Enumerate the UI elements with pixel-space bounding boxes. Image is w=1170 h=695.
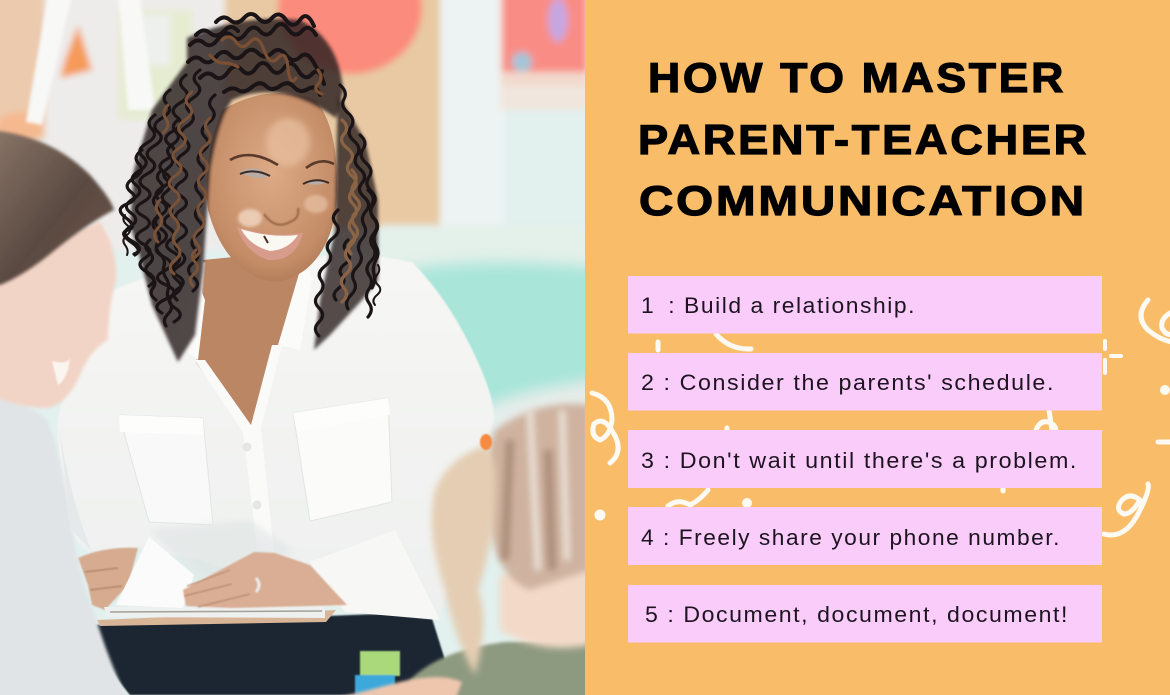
title <box>638 54 1089 224</box>
nose <box>264 208 298 225</box>
teacher: hair <box>120 14 380 362</box>
teacher: trousers <box>92 612 445 695</box>
teacher: left pocket <box>119 415 213 525</box>
teacher: shirt placket <box>196 345 281 534</box>
dark curly strands, left <box>120 70 215 326</box>
decorative white squiggles <box>592 300 1170 535</box>
teal sofa <box>414 255 585 409</box>
parent: smile <box>52 358 70 385</box>
papers <box>104 537 325 618</box>
eyes and brows <box>230 155 334 185</box>
tip 3 <box>628 430 1102 488</box>
hair bun on top <box>188 14 324 95</box>
hair mass <box>130 19 378 362</box>
child: neck <box>500 560 590 648</box>
parent on the left, blurred foreground <box>0 130 128 695</box>
photo: teacher meeting with parent and child <box>0 0 600 695</box>
parent: face <box>0 222 116 408</box>
tip list <box>628 276 1102 642</box>
teacher: right pocket <box>293 398 392 521</box>
child: blonde hair <box>432 404 590 675</box>
dark curly strands, right <box>316 85 378 336</box>
tip 4: 4 : Freely share your phone number. <box>641 525 1061 550</box>
teacher <box>57 14 494 695</box>
teacher: collar <box>196 272 302 360</box>
child: shirt <box>405 640 590 695</box>
loose curl ends <box>123 215 380 305</box>
child: orange hair tie <box>480 434 492 450</box>
smile <box>237 227 303 260</box>
brown curly strands, left <box>154 92 210 286</box>
tip 2 <box>628 353 1102 410</box>
tip 4 <box>628 507 1102 565</box>
toy blocks <box>355 651 400 695</box>
panel: orange background <box>585 0 1170 695</box>
parent: sweater <box>0 396 128 695</box>
title: PARENT-TEACHER <box>638 116 1089 163</box>
title: COMMUNICATION <box>639 177 1087 224</box>
white easel legs <box>26 0 155 125</box>
teacher: neck and chest <box>196 257 299 425</box>
brown curly strands, right <box>341 120 360 302</box>
tip 2: 2 : Consider the parents' schedule. <box>641 370 1055 395</box>
teacher: left hand <box>78 548 138 610</box>
tip 5 <box>628 585 1102 642</box>
tip 5: 5 : Document, document, document! <box>645 602 1069 627</box>
tip 1: 1 : Build a relationship. <box>641 293 916 318</box>
child: hand <box>330 677 462 695</box>
child in the foreground <box>330 404 590 695</box>
tip 3: 3 : Don't wait until there's a problem. <box>641 448 1078 473</box>
tip 1 <box>628 276 1102 334</box>
teacher: white shirt <box>57 250 494 620</box>
teacher: face <box>207 93 337 282</box>
clipboard <box>97 610 336 626</box>
title: HOW TO MASTER <box>648 54 1066 101</box>
parent: hair <box>0 130 114 285</box>
photo background: classroom <box>0 0 600 695</box>
teacher: right hand with ring <box>183 552 347 608</box>
